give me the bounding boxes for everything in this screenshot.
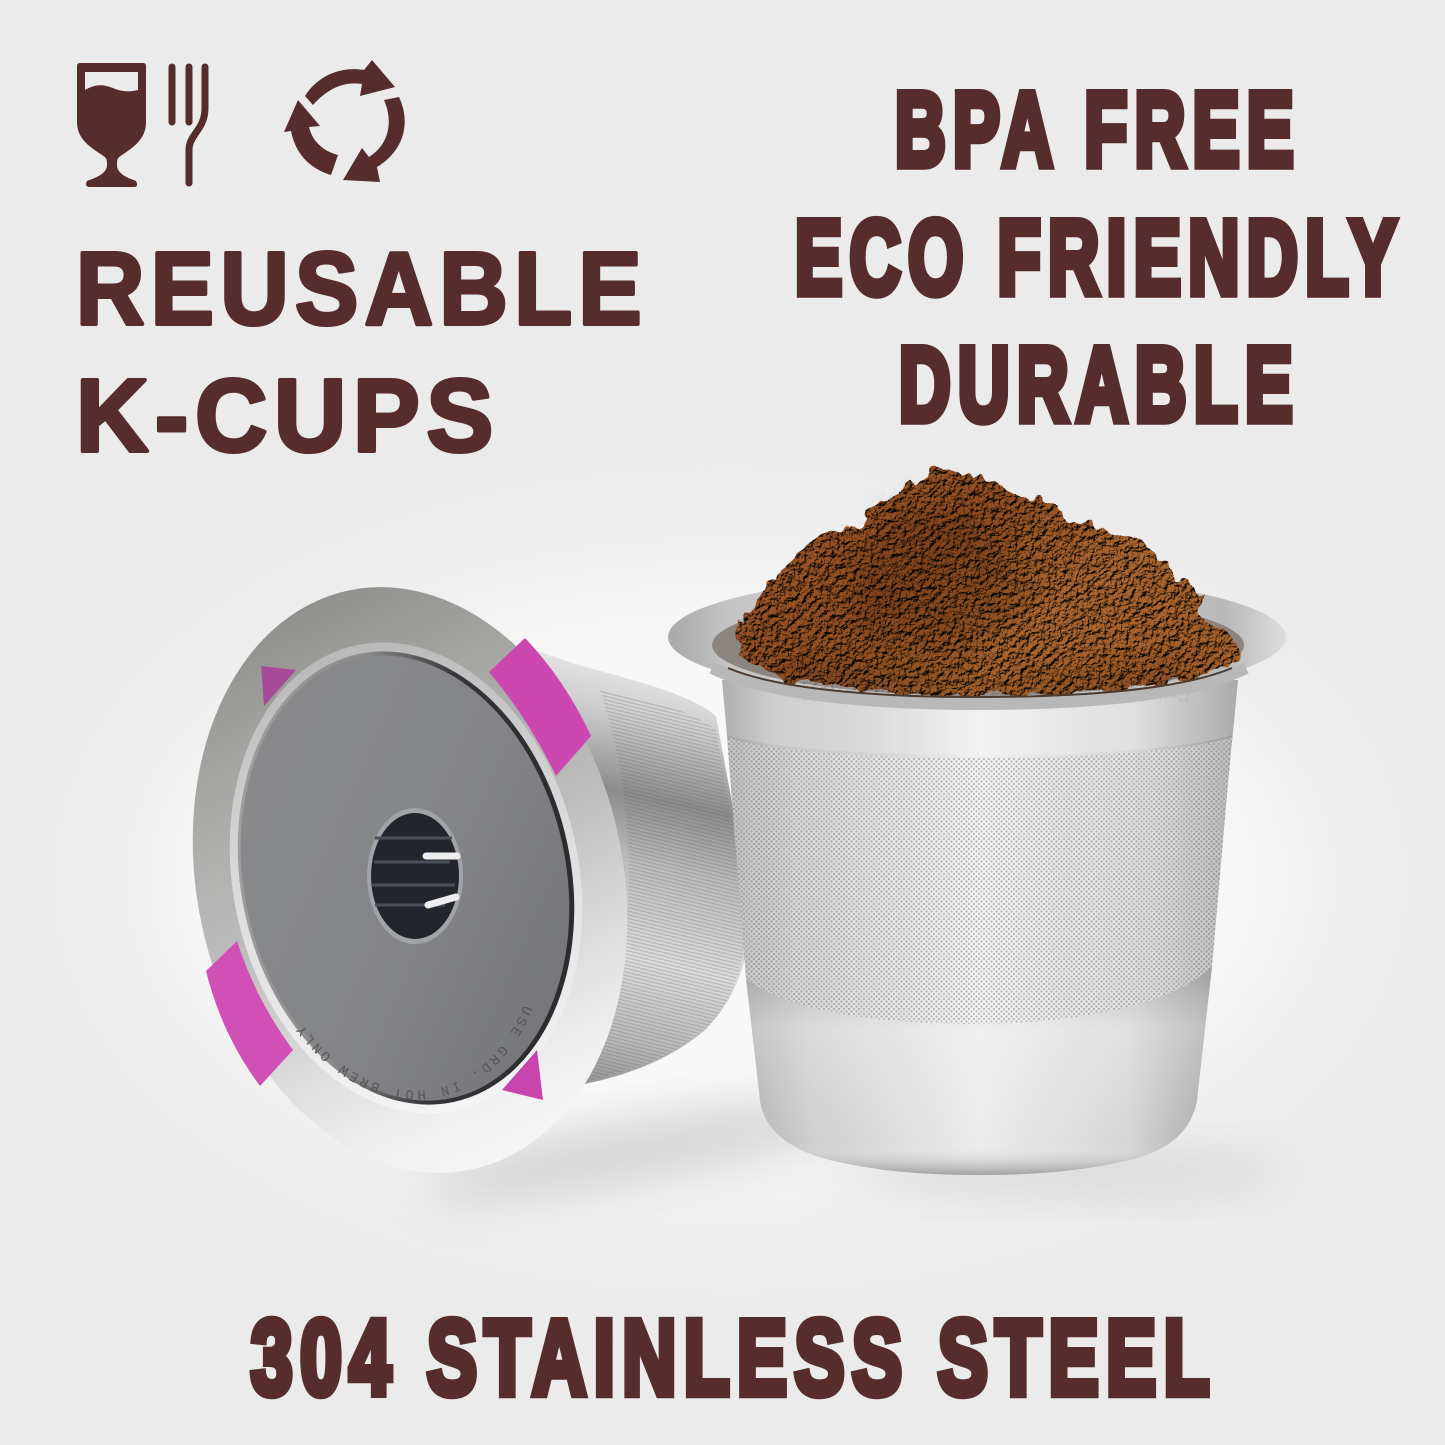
inner lip xyxy=(187,609,625,1147)
perforated mesh xyxy=(727,737,1232,1024)
upright cup with coffee xyxy=(668,469,1286,1175)
cylinder body xyxy=(400,645,750,1088)
shadows under cups xyxy=(418,1082,1280,1218)
centre hole xyxy=(367,808,463,944)
heading: product benefits xyxy=(795,72,1404,444)
flared rim xyxy=(668,574,1286,700)
heading: reusable k-cups: K-CUPS xyxy=(76,358,500,473)
front lip of rim xyxy=(712,668,1246,704)
cup body xyxy=(722,680,1238,1175)
heading: reusable k-cups: REUSABLE xyxy=(76,231,648,346)
grey lid face xyxy=(201,624,609,1132)
ground coffee xyxy=(738,469,1238,695)
dark seam xyxy=(197,620,615,1136)
pink triangle: top left xyxy=(261,666,296,706)
pink strip: bottom left xyxy=(206,941,293,1086)
icon: wine glass xyxy=(77,63,146,187)
icon: fork xyxy=(172,67,205,183)
pink strip: top right xyxy=(489,638,591,776)
solid lower band xyxy=(746,967,1212,1175)
pink triangle: bottom right xyxy=(502,1050,543,1100)
heading: reusable k-cups xyxy=(76,231,648,473)
icon: recycle arrows xyxy=(284,60,405,182)
rim opening xyxy=(712,594,1244,696)
outer flange xyxy=(140,546,680,1214)
embossed lid text: USE GRD. IN HOT BREW ONLY xyxy=(296,1006,532,1100)
cup lying on its side xyxy=(192,587,744,1173)
smooth upper band xyxy=(722,680,1238,755)
